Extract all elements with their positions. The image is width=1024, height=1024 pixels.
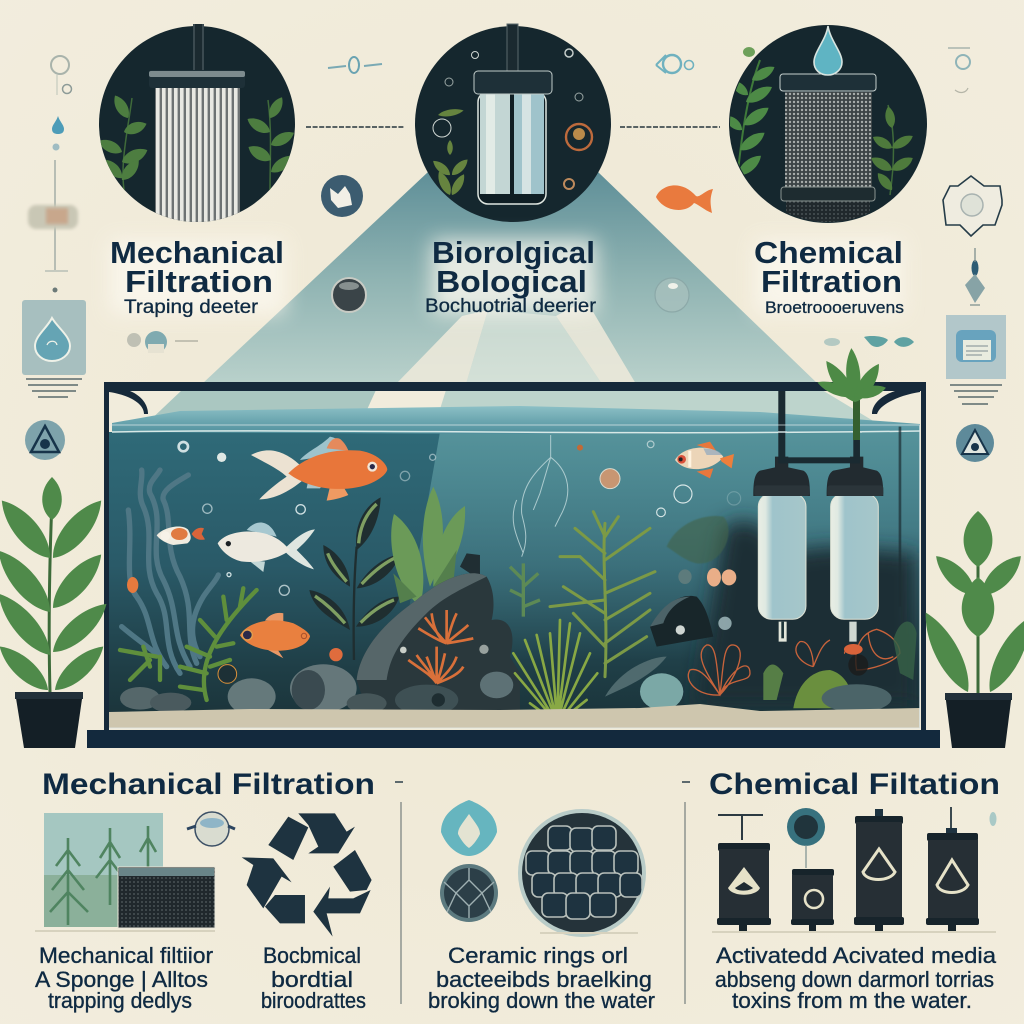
tank frame left post: [104, 382, 109, 730]
orange outline coral: [688, 629, 900, 695]
heading: mechanical filtration: Filtration: [125, 264, 273, 299]
icon: ceramic ring disc: [518, 809, 646, 937]
heading: biological filtration: Biorolgical: [432, 235, 595, 270]
bubbles: [647, 441, 741, 517]
large fern: [550, 512, 655, 677]
tiny accents: [218, 645, 489, 683]
right aquascape: [510, 390, 917, 723]
icon: left triangle badge: [25, 420, 65, 460]
dark rock: [650, 596, 713, 647]
panel: biological filter circle: [415, 24, 611, 222]
bubbles: [179, 442, 436, 595]
grey fish-like rock: [605, 657, 667, 697]
caption: activated media: toxins from m the water.: [732, 988, 972, 1013]
icon: right triangle badge: [956, 424, 994, 462]
heading: biological filtration: Bological: [436, 264, 587, 299]
divider left: [400, 802, 402, 1004]
left tiny text: [26, 378, 82, 398]
caption: activated media: abbseng down darmorl torrias: [715, 967, 994, 992]
chemical media cylinder 3: [854, 809, 904, 932]
title glow backgrounds: [110, 240, 903, 314]
tank: [87, 382, 940, 748]
icon: orange fish floating: [656, 185, 713, 213]
floating icons between circles: [127, 55, 694, 353]
caption: biological: Bocbmical: [263, 943, 361, 968]
caption: ceramic rings: [428, 943, 655, 1013]
fish: tiny left: [127, 577, 138, 593]
left potted plant: [0, 477, 114, 748]
rocks: [357, 553, 520, 710]
stones: [120, 664, 513, 715]
tank interior above water: [108, 390, 920, 432]
heading: chemical filtration: Chemical: [754, 235, 903, 270]
white root lines: [513, 435, 568, 557]
radial fern: [513, 620, 597, 723]
broad plant: [391, 487, 465, 607]
fish: white: [218, 522, 315, 572]
green mass: [763, 622, 917, 712]
caption: ceramic rings: Ceramic rings orl: [448, 943, 628, 968]
heading: biological filtration: [425, 235, 597, 317]
caption: activated media: [715, 943, 997, 1013]
caption: ceramic rings: bacteeibds braelking: [436, 967, 652, 992]
fern: [120, 588, 257, 700]
right side icon column: [943, 48, 1002, 305]
thin right tube: [896, 427, 904, 607]
background dark bushes: [667, 516, 917, 707]
light beam from biological filter to tank: [202, 172, 818, 384]
caption: mechanical: A Sponge | Alltos: [35, 967, 208, 992]
mechanical illustration: plants and sponge: [44, 813, 215, 928]
caption: mechanical: [35, 943, 213, 1013]
connector: mechanical to biological: [306, 126, 405, 128]
section: bottom heading chemical: Chemical Filtation: [709, 768, 1000, 801]
chemical media cylinder 4: [926, 807, 979, 932]
corner brace right: [872, 391, 920, 414]
panel: chemical filter circle: [722, 25, 927, 224]
sand substrate: [108, 704, 920, 728]
icon: small bubble creature: [187, 812, 235, 846]
dash marks: [395, 781, 690, 783]
card: left water drop: [22, 300, 86, 375]
caption: biological: bordtial: [271, 967, 353, 992]
heading: chemical filtration: [754, 235, 904, 317]
water surface: [112, 406, 920, 434]
chemical media cylinder 2: [791, 869, 834, 931]
surface glare lines on pipes: [778, 431, 862, 433]
fish: right orange: [675, 442, 734, 478]
caption: mechanical: trapping dedlys: [48, 988, 192, 1013]
pipes: [778, 390, 860, 463]
heading: mechanical filtration: [110, 235, 284, 318]
caption: activated media: Activatedd Acivated media: [716, 943, 997, 968]
heading: chemical filtration: Filtration: [761, 264, 902, 299]
corner brace left: [109, 391, 148, 414]
left aquascape: [120, 437, 520, 715]
panel: mechanical filter circle: [96, 24, 297, 226]
fish: large orange: [251, 437, 387, 501]
heading: mechanical filtration: Traping deeter: [124, 297, 259, 318]
lighter light shaft in water: [410, 432, 920, 632]
card: right manual: [946, 315, 1006, 379]
narrow leaf plant: [309, 497, 401, 660]
media disc icon: [787, 808, 825, 868]
small left fern: [510, 563, 540, 617]
water: [108, 432, 920, 728]
icon: leaf sprig top left of bio circle: [743, 47, 755, 57]
stone: [640, 673, 683, 710]
small teal blobs above right plant: [824, 336, 914, 347]
chemical media cylinder 1: [717, 815, 771, 932]
icon: teal gem: [441, 800, 497, 856]
caption: mechanical: Mechanical filtiior: [39, 943, 213, 968]
right tiny text: [950, 384, 1002, 405]
divider right: [684, 802, 686, 1004]
tank base: [87, 730, 940, 748]
heading: mechanical filtration: Mechanical: [110, 235, 284, 270]
shelf shadow: [35, 931, 996, 933]
surface line: [112, 431, 920, 433]
seaweed: [122, 470, 218, 673]
icon: recycling symbol: [242, 813, 372, 937]
teal droplet accent: [990, 812, 996, 826]
filter right: [827, 457, 883, 642]
fish: small clown: [157, 526, 205, 545]
tank frame top: [104, 382, 926, 391]
heading: chemical filtration: Broetroooeruvens: [765, 298, 904, 317]
plant above the tank: [816, 348, 887, 440]
glass highlight: [108, 425, 920, 728]
caption: biological: biroodrattes: [261, 988, 366, 1013]
tank frame right post: [921, 382, 926, 730]
filter left: [753, 457, 810, 642]
right potted plant: [915, 511, 1024, 748]
section: bottom heading mechanical: Mechanical Filtration: [42, 768, 375, 801]
connector: biological to chemical: [620, 126, 720, 128]
caption: biological: [261, 943, 366, 1013]
left side icon column: [28, 56, 78, 292]
caption: ceramic rings: broking down the water: [428, 988, 655, 1013]
icon: dark media disc: [440, 864, 498, 922]
orange coral: [408, 610, 473, 683]
heading: biological filtration: Bochuotrial deerier: [425, 296, 597, 317]
shell and small items: [577, 445, 736, 635]
fish: lower orange: [240, 613, 310, 658]
